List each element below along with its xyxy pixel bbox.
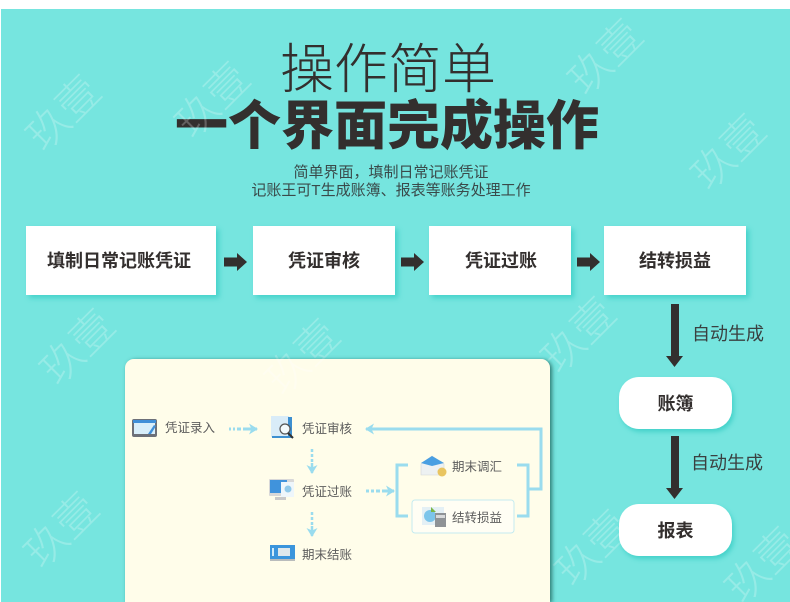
- watermarks: 玖壹: [17, 67, 110, 160]
- step box: 凭证审核: [253, 226, 395, 295]
- arrow: down to 账簿: [666, 304, 683, 367]
- icon: voucher review: [271, 416, 293, 438]
- subtitle text: 记账王可T生成账簿、报表等账务处理工作: [251, 182, 531, 199]
- selected item frame: [412, 500, 514, 533]
- arrow: step 1 to step 2: [224, 253, 247, 271]
- panel contents: [132, 416, 541, 562]
- arrow: down to 报表: [666, 436, 683, 499]
- title: light line: 操作简单: [280, 40, 496, 100]
- workflow labels: 期末调汇: [452, 460, 502, 474]
- arrow: step 2 to step 3: [401, 253, 424, 271]
- step box: 凭证审核: 凭证审核: [288, 251, 360, 271]
- icon: voucher entry: [132, 419, 157, 437]
- panel: workflow screenshot: [124, 357, 555, 602]
- workflow labels: [165, 420, 502, 562]
- workflow labels: 凭证过账: [302, 484, 353, 499]
- pill: 报表: [619, 504, 732, 556]
- workflow labels: 凭证审核: [302, 421, 353, 436]
- subtitle text: [251, 164, 531, 199]
- step box: 填制日常记账凭证: [26, 226, 216, 295]
- watermarks: 玖壹: [256, 311, 349, 404]
- watermarks: 玖壹: [15, 484, 108, 577]
- flow connectors: [229, 429, 541, 536]
- step box: 凭证过账: 凭证过账: [465, 251, 537, 271]
- label: 自动生成 lower: 自动生成: [691, 453, 763, 473]
- icon: posting monitor: [269, 479, 294, 500]
- watermarks: 玖壹: [682, 106, 775, 199]
- workflow labels: 期末结账: [302, 548, 353, 562]
- icon: period-end closing: [270, 545, 295, 561]
- step box: 结转损益: 结转损益: [639, 251, 711, 271]
- arrow: step 3 to step 4: [577, 253, 600, 271]
- panel faint watermark: 玖壹: [256, 311, 349, 404]
- step box: 凭证过账: [429, 226, 571, 295]
- icon: envelope: [421, 456, 446, 476]
- icon: pie and calculator: [422, 507, 446, 527]
- workflow labels: 结转损益: [452, 510, 502, 525]
- step box: 填制日常记账凭证: 填制日常记账凭证: [47, 251, 191, 271]
- step box: 结转损益: [604, 226, 746, 295]
- title: bold line: 一个界面完成操作: [175, 97, 599, 156]
- label: 自动生成 upper: 自动生成: [692, 324, 764, 344]
- watermarks: 玖壹: [559, 11, 652, 104]
- pill: 报表: 报表: [658, 521, 694, 541]
- panel background: [125, 359, 550, 602]
- pill: 账簿: 账簿: [658, 394, 694, 414]
- watermarks: 玖壹: [532, 289, 625, 382]
- watermarks: 玖壹: [31, 301, 124, 394]
- pill: 账簿: [619, 377, 732, 429]
- workflow labels: 凭证录入: [165, 420, 216, 435]
- subtitle text: 简单界面，填制日常记账凭证: [293, 164, 488, 181]
- watermarks: 玖壹: [546, 502, 639, 595]
- watermarks: 玖壹: [166, 54, 259, 147]
